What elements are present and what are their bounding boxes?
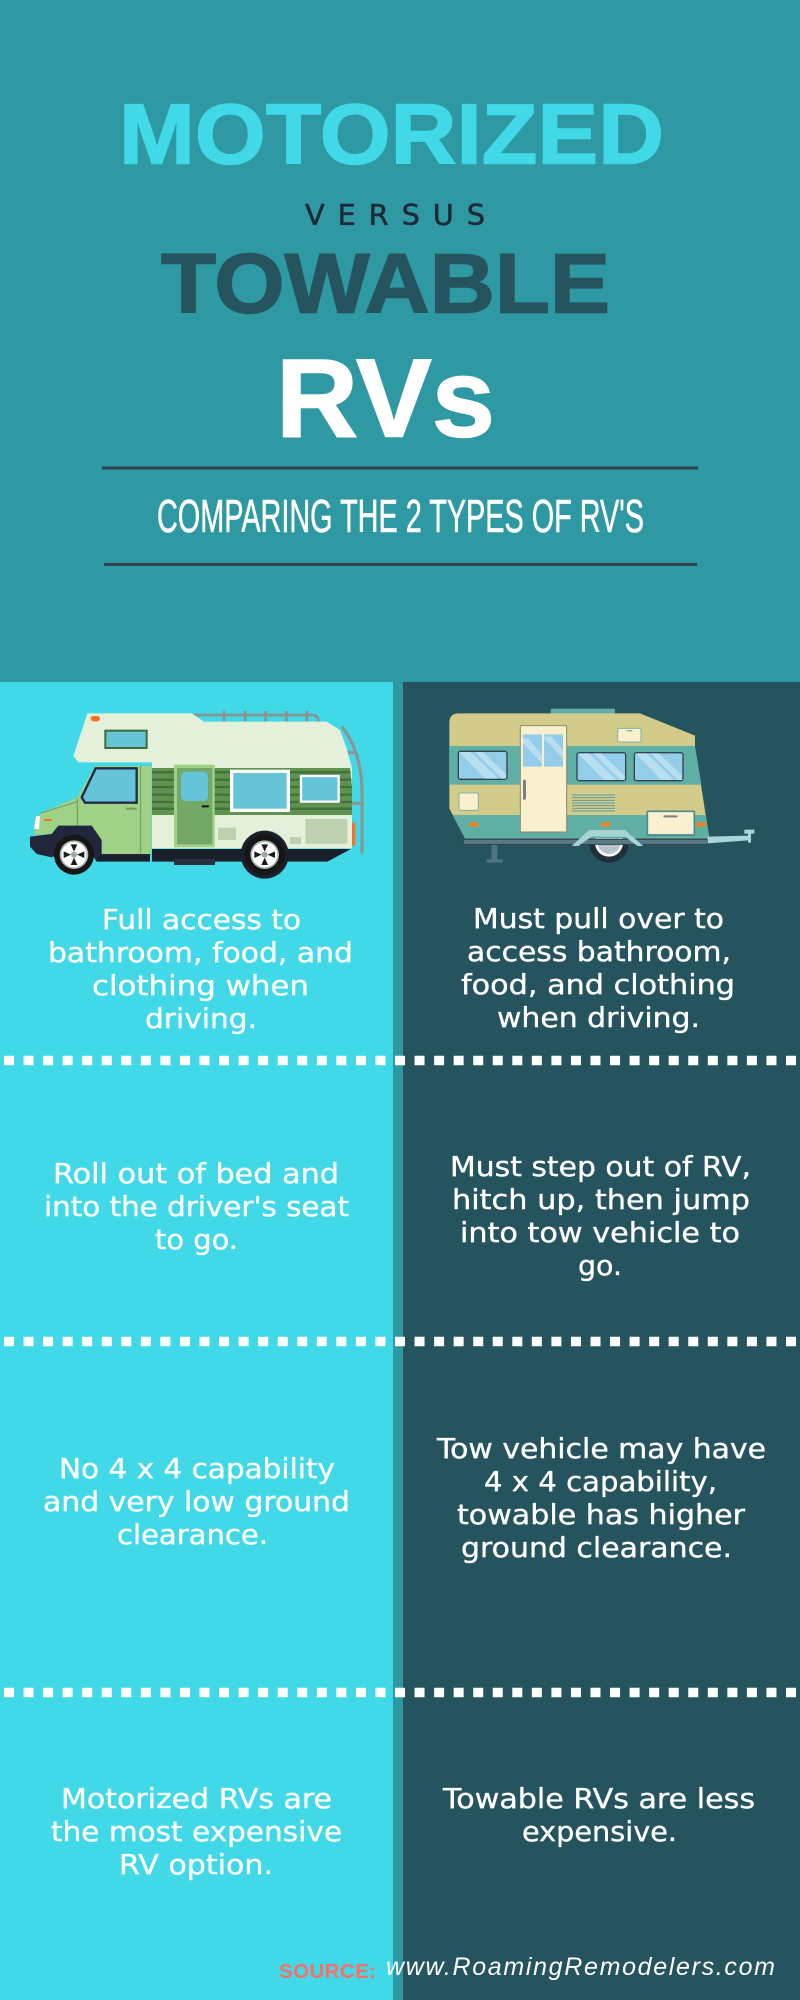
rear window — [458, 751, 507, 779]
text: motorized price — [51, 1784, 342, 1881]
dotted divider 3 — [4, 1688, 800, 1697]
title: towable: TOWABLE — [161, 236, 610, 330]
text: motorized comfort: driving. — [145, 1004, 257, 1035]
camper body — [73, 713, 352, 848]
chassis — [463, 839, 708, 844]
storage box — [647, 811, 694, 835]
upper window — [105, 731, 147, 748]
cab — [34, 766, 152, 854]
bottom rule — [104, 563, 697, 566]
cab window — [82, 768, 137, 803]
source label: SOURCE: — [279, 1960, 376, 1983]
dotted divider 1 — [4, 1056, 800, 1065]
panel: header — [102, 88, 698, 566]
text: towable setup: go. — [578, 1251, 622, 1282]
roof vent — [551, 709, 615, 715]
text: towable price: expensive. — [522, 1817, 677, 1848]
text: motorized setup: into the driver's seat — [44, 1192, 349, 1223]
text: towable comfort: food, and clothing — [461, 970, 735, 1001]
text: towable setup — [450, 1152, 751, 1282]
title: versus: VERSUS — [305, 198, 485, 232]
trailer body — [449, 713, 709, 838]
text: motorized clearance: No 4 x 4 capability — [59, 1454, 335, 1485]
text: towable comfort: Must pull over to — [473, 904, 724, 935]
text: towable clearance: Tow vehicle may have — [436, 1434, 766, 1465]
cab details — [40, 766, 141, 854]
top rule — [102, 466, 698, 470]
roof hatch — [618, 728, 641, 742]
icon: towable RV — [449, 709, 754, 863]
text: motorized setup — [44, 1159, 349, 1256]
panel: motorized column — [0, 682, 393, 2000]
small window — [301, 776, 339, 802]
front window — [634, 753, 683, 781]
text: motorized price: Motorized RVs are — [61, 1784, 332, 1815]
jack — [487, 844, 503, 863]
skirt — [97, 849, 351, 862]
text: towable setup: into tow vehicle to — [460, 1218, 740, 1249]
front wheel — [54, 835, 94, 875]
panel: towable column — [403, 682, 800, 2000]
lower panels — [218, 819, 347, 844]
rear wheel arch — [241, 831, 289, 879]
marker lights — [469, 822, 706, 827]
text: towable comfort: access bathroom, — [467, 937, 731, 968]
text: motorized setup: to go. — [155, 1225, 238, 1256]
side marker — [44, 819, 52, 821]
middle window — [577, 753, 626, 781]
source url: www.RoamingRemodelers.com — [386, 1953, 775, 1981]
rear ladder — [343, 728, 363, 852]
door — [174, 765, 215, 847]
text: motorized price: the most expensive — [51, 1817, 342, 1848]
door — [520, 726, 567, 832]
striped green band — [152, 768, 352, 815]
dotted divider 2 — [4, 1337, 800, 1346]
vent slats — [572, 795, 615, 811]
roof marker — [91, 716, 100, 721]
cab handle — [126, 808, 137, 810]
text: motorized price: RV option. — [119, 1850, 273, 1881]
title: RVs: RVs — [276, 336, 495, 460]
text: towable clearance: ground clearance. — [461, 1533, 732, 1564]
text: towable comfort — [461, 904, 735, 1034]
text: towable comfort: when driving. — [497, 1003, 700, 1034]
text: motorized setup: Roll out of bed and — [53, 1159, 339, 1190]
rear wheel — [245, 835, 285, 875]
text: towable setup: hitch up, then jump — [452, 1185, 750, 1216]
headlight — [34, 816, 40, 829]
text: motorized clearance — [43, 1454, 350, 1551]
large window — [232, 771, 288, 810]
front bumper and arch — [30, 826, 150, 862]
text: towable clearance: 4 x 4 capability, — [484, 1467, 717, 1498]
text: towable price — [442, 1784, 755, 1848]
text: motorized comfort: Full access to — [102, 905, 301, 936]
text: motorized comfort — [48, 905, 353, 1035]
fender — [572, 830, 643, 846]
teal bands — [449, 746, 709, 838]
icon: motorized RV — [30, 711, 363, 879]
text: towable price: Towable RVs are less — [442, 1784, 755, 1815]
rear light — [352, 823, 355, 846]
text: motorized comfort: bathroom, food, and — [48, 938, 353, 969]
text: towable clearance: towable has higher — [457, 1500, 746, 1531]
text: motorized clearance: and very low ground — [43, 1487, 350, 1518]
text: towable clearance — [436, 1434, 766, 1564]
text: motorized clearance: clearance. — [117, 1520, 268, 1551]
roof rack — [193, 711, 318, 722]
text: motorized comfort: clothing when — [92, 971, 309, 1002]
tow hitch — [708, 830, 754, 843]
wheel — [589, 823, 629, 863]
step — [174, 859, 215, 865]
text: towable setup: Must step out of RV, — [450, 1152, 751, 1183]
title: motorized: MOTORIZED — [119, 88, 664, 182]
small hatch — [459, 793, 478, 810]
